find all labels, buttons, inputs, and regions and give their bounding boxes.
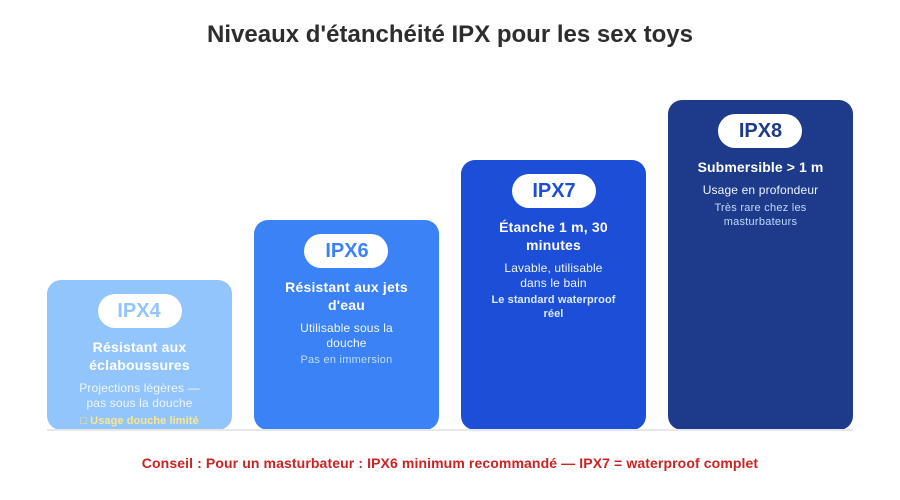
heading: IPX4: éclaboussures <box>89 357 190 373</box>
description: IPX6: douche <box>326 336 367 350</box>
note: IPX4: □ Usage douche limité <box>80 415 199 427</box>
description: IPX7: Lavable, utilisable <box>504 261 603 275</box>
heading: IPX4: Résistant aux <box>93 339 186 355</box>
description: IPX6: Utilisable sous la <box>300 321 393 335</box>
badge: IPX6 <box>304 234 388 268</box>
title: Niveaux d'étanchéité IPX pour les sex toys <box>207 21 693 48</box>
heading: IPX7 <box>499 219 608 253</box>
heading: IPX7: Étanche 1 m, 30 <box>499 219 608 235</box>
description: IPX4 <box>79 381 200 410</box>
heading: IPX6: Résistant aux jets <box>285 279 408 295</box>
description: IPX4: pas sous la douche <box>86 396 193 410</box>
note: IPX7: réel <box>544 308 563 320</box>
description: IPX7: dans le bain <box>520 276 587 290</box>
heading: IPX4 <box>89 339 190 373</box>
badge: IPX8 <box>718 114 802 148</box>
badge: IPX8: IPX8 <box>739 120 782 142</box>
note: IPX8: Très rare chez les <box>714 202 807 214</box>
panel: IPX4 <box>47 280 232 430</box>
badge: IPX4: IPX4 <box>117 300 161 322</box>
note: IPX8: masturbateurs <box>724 216 797 228</box>
description: IPX6 <box>300 321 393 350</box>
panel: IPX8 <box>668 100 853 430</box>
badge: IPX6: IPX6 <box>325 240 369 262</box>
baseline <box>47 429 853 431</box>
heading: IPX8: Submersible > 1 m <box>698 159 823 175</box>
description: IPX7 <box>504 261 603 290</box>
note: IPX8 <box>714 202 807 228</box>
heading: IPX6 <box>285 279 408 313</box>
panel: IPX6 <box>254 220 439 430</box>
panel: IPX7 <box>461 160 646 430</box>
badge: IPX7: IPX7 <box>532 180 576 202</box>
heading: IPX7: minutes <box>526 237 581 253</box>
description: IPX8: Usage en profondeur <box>703 183 818 197</box>
badge: IPX7 <box>512 174 596 208</box>
note: IPX7 <box>491 294 616 320</box>
advice callout: Conseil : Pour un masturbateur : IPX6 minimum recommandé — IPX7 = waterproof complet <box>142 455 758 471</box>
heading: IPX6: d'eau <box>328 297 365 313</box>
note: IPX6: Pas en immersion <box>300 354 393 366</box>
badge: IPX4 <box>98 294 182 328</box>
note: IPX7: Le standard waterproof <box>491 294 616 306</box>
description: IPX4: Projections légères — <box>79 381 200 395</box>
